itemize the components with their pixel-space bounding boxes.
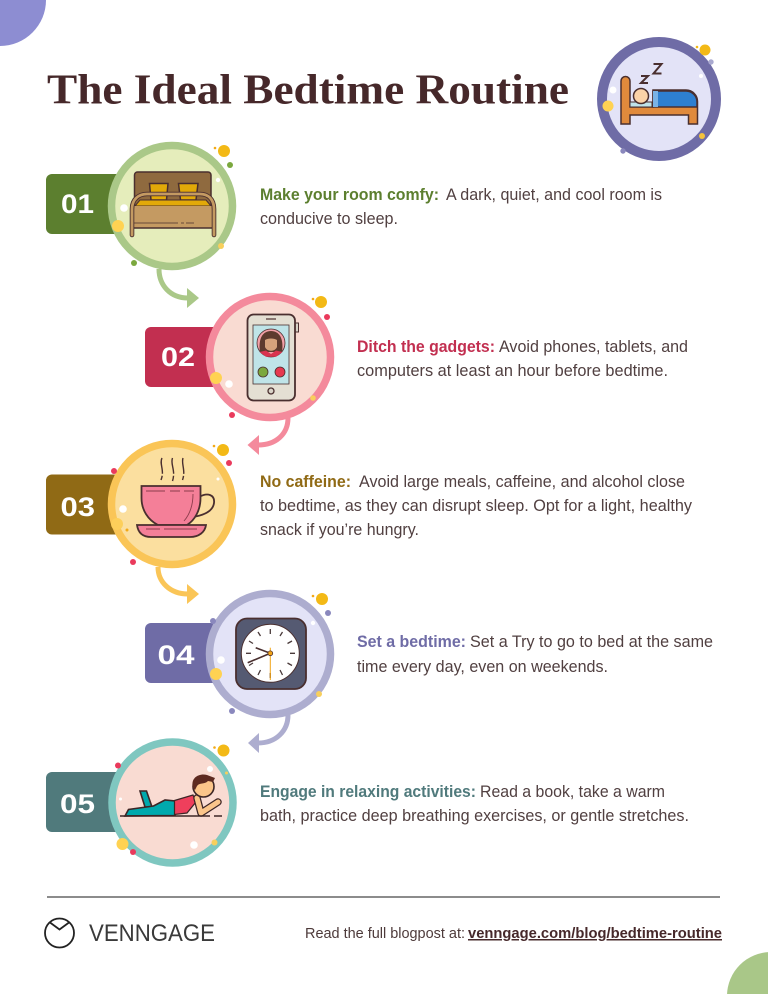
step 1 text: conducive to sleep. [260, 210, 398, 228]
step 4 text: Set a Try to go to bed at the same [470, 633, 713, 651]
circle 03 [111, 444, 232, 565]
title: The Ideal Bedtime Routine [47, 68, 569, 114]
step 2 text: computers at least an hour before bedtime. [357, 362, 668, 380]
icon: bed [132, 172, 214, 235]
arrow 4 to 5 [248, 715, 288, 753]
circle 05 [112, 742, 233, 863]
badge 03: 03 [60, 492, 95, 522]
circle 02 [210, 296, 330, 418]
step 5 text [260, 783, 689, 825]
badge 03 [46, 474, 126, 534]
footer: source link [305, 925, 722, 942]
badge 02 [145, 327, 225, 387]
circle 01 [112, 145, 233, 266]
step 1 [46, 145, 662, 308]
step 4 text: Set a bedtime: [357, 633, 466, 651]
step 2 text: Ditch the gadgets: [357, 338, 495, 356]
badge 05 [46, 772, 126, 832]
step 1 text: Make your room comfy: [260, 186, 439, 204]
icon: sleeping person in bed [602, 42, 716, 156]
step 1 text [260, 186, 662, 228]
arrow 3 to 4 [158, 567, 199, 604]
step 3 [46, 444, 693, 604]
icon: clock [236, 618, 306, 689]
step 3 text: No caffeine: [260, 473, 351, 491]
step 2 [145, 296, 688, 455]
step 5 text: Engage in relaxing activities: [260, 783, 476, 801]
badge 04: 04 [158, 640, 194, 670]
step 3 text: Avoid large meals, caffeine, and alcohol close [359, 473, 685, 491]
icon: coffee cup [137, 458, 214, 537]
step 3 text [260, 473, 693, 539]
step 5 [46, 742, 689, 863]
step 4 [145, 593, 713, 753]
step 4 text: time every day, even on weekends. [357, 658, 608, 676]
circle 04 [210, 593, 331, 714]
step 3 text: snack if you’re hungry. [260, 521, 419, 539]
arrow 1 to 2 [159, 269, 199, 308]
step 2 text [357, 338, 688, 380]
badge 01 [46, 174, 126, 234]
footer: Venngage logo [45, 918, 215, 948]
decorative corner: bottom right [727, 952, 768, 994]
badge 01: 01 [61, 189, 94, 219]
badge 02: 02 [161, 342, 195, 372]
badge 04 [145, 623, 225, 683]
arrow 2 to 3 [248, 418, 288, 455]
footer: Venngage logo: VENNGAGE [89, 920, 215, 947]
step 5 text: Read a book, take a warm [480, 783, 665, 801]
step 3 text: to bedtime, as they can disrupt sleep. Opt for a light, healthy [260, 497, 693, 515]
badge 05: 05 [60, 789, 95, 819]
footer: source link: venngage.com/blog/bedtime-routine [468, 925, 722, 942]
icon: person reading on floor [120, 775, 222, 816]
step 4 text [357, 633, 713, 676]
footer: source link: Read the full blogpost at: [305, 925, 465, 942]
step 5 text: bath, practice deep breathing exercises, or gentle stretches. [260, 807, 689, 825]
step 2 text: Avoid phones, tablets, and [499, 338, 688, 356]
step 1 text: A dark, quiet, and cool room is [446, 186, 662, 204]
icon: smartphone [248, 314, 298, 400]
decorative corner: top left [0, 0, 46, 46]
